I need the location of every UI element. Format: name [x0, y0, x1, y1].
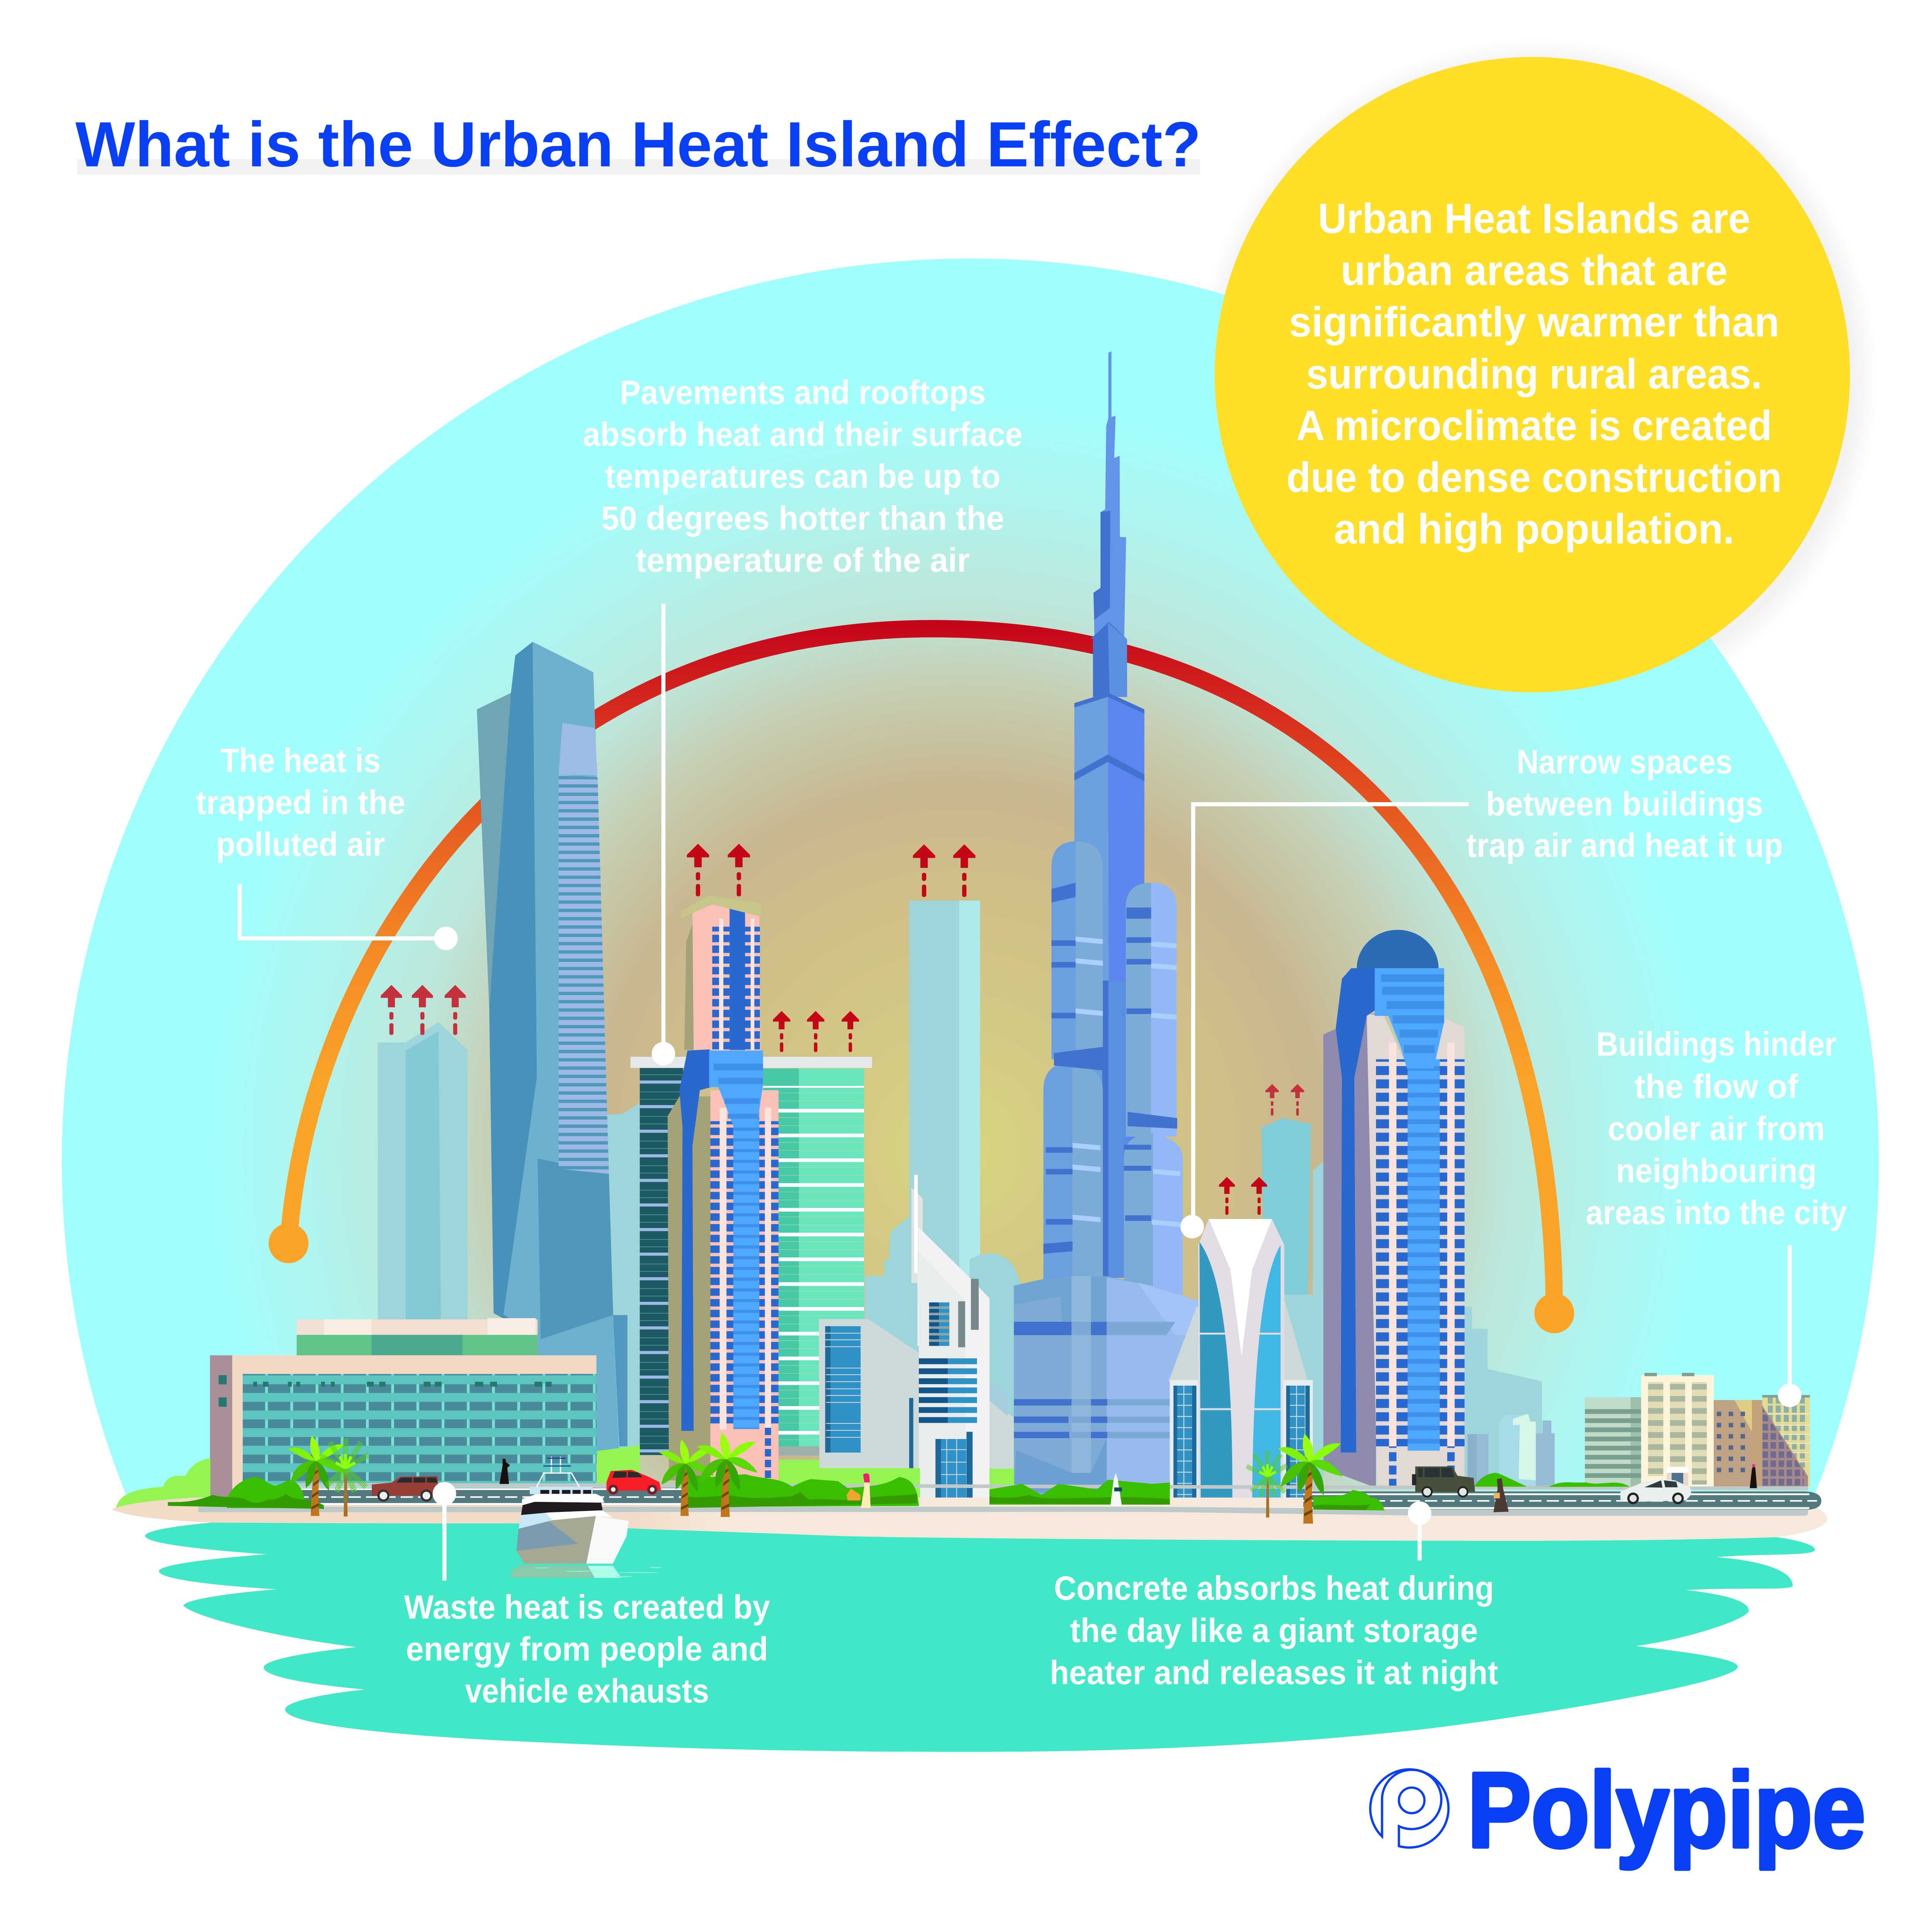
- red car: [607, 1470, 661, 1495]
- bushes right: [1313, 1473, 1630, 1510]
- rear pink tower: [681, 895, 762, 1051]
- text: buildings hinder: neighbouring: [1616, 1152, 1817, 1190]
- text: concrete: the day like a giant storage: [1070, 1611, 1478, 1649]
- callout lines and dots: [240, 604, 1801, 1581]
- Polypipe logo: Polypipe: [1468, 1750, 1866, 1870]
- Burj body and lobes: [1043, 622, 1183, 1294]
- shadow of yellow circle: [1194, 38, 1878, 723]
- text: narrow spaces: trap air and heat it up: [1466, 827, 1783, 864]
- yellow definition circle: due to dense construction: [1286, 454, 1782, 501]
- text: buildings hinder: cooler air from: [1608, 1109, 1825, 1147]
- text: heat trapped: [196, 742, 405, 863]
- text: waste heat: energy from people and: [406, 1630, 768, 1668]
- palm trees: [288, 1432, 1343, 1524]
- heat dome: [62, 259, 1879, 1508]
- text: buildings hinder: areas into the city: [1586, 1194, 1847, 1231]
- text: concrete: Concrete absorbs heat during: [1054, 1569, 1494, 1607]
- brown car: [372, 1476, 439, 1502]
- teal rear tower right: [1262, 1118, 1323, 1490]
- pedestrians: [500, 1459, 1757, 1512]
- text: narrow spaces: [1466, 743, 1783, 864]
- hotel: [210, 1318, 597, 1501]
- text: buildings hinder: [1586, 1025, 1847, 1231]
- teal tower with roof: [631, 1057, 872, 1455]
- text: pavements: absorb heat and their surface: [583, 415, 1022, 453]
- yellow definition circle: surrounding rural areas.: [1306, 350, 1762, 398]
- white car: [1620, 1479, 1692, 1504]
- text: narrow spaces: between buildings: [1486, 785, 1763, 823]
- text: heat trapped: polluted air: [216, 825, 385, 863]
- Burj podium: [1014, 1276, 1198, 1507]
- text: pavements: Pavements and rooftops: [620, 374, 986, 412]
- title: What is the Urban Heat Island Effect?: [75, 109, 1201, 180]
- pale centre tower and silhouettes: [865, 901, 1021, 1469]
- dark SUV: [1412, 1466, 1475, 1497]
- yellow definition circle: A microclimate is created: [1296, 402, 1772, 449]
- yellow definition circle: and high population.: [1334, 506, 1734, 553]
- heat arrows: [381, 844, 1304, 1215]
- bushes centre: [681, 1474, 1170, 1508]
- yellow definition circle: [1215, 57, 1850, 692]
- text: pavements: 50 degrees hotter than the: [601, 499, 1004, 537]
- far left pale tower: [378, 1022, 468, 1332]
- blue tower with dome: [1323, 930, 1464, 1488]
- text: waste heat: vehicle exhausts: [465, 1672, 709, 1710]
- road and pavements: [198, 1483, 1821, 1516]
- yellow definition circle: significantly warmer than: [1289, 299, 1779, 346]
- text: waste heat: Waste heat is created by: [404, 1588, 770, 1626]
- heat arc with end points: [269, 629, 1574, 1333]
- yellow definition circle: Urban Heat Islands are: [1318, 195, 1750, 242]
- yacht: [511, 1457, 662, 1578]
- text: concrete: heater and releases it at night: [1050, 1653, 1498, 1691]
- bushes left: [168, 1477, 324, 1509]
- far right skyline silhouettes: [1464, 1307, 1542, 1488]
- grey office building: [819, 1319, 919, 1469]
- text: buildings hinder: the flow of: [1634, 1067, 1799, 1105]
- text: narrow spaces: Narrow spaces: [1517, 743, 1732, 781]
- text: heat trapped: The heat is: [220, 742, 381, 779]
- Burj spire: [1090, 351, 1127, 639]
- twin curved tower: [1158, 1219, 1317, 1516]
- text: pavements: temperatures can be up to: [605, 457, 1000, 495]
- text: waste heat: [404, 1588, 770, 1710]
- white emirates tower: [909, 1175, 1014, 1506]
- beach: [112, 1498, 1827, 1541]
- text: heat trapped: trapped in the: [196, 783, 405, 821]
- right low buildings: [1468, 1373, 1810, 1487]
- front pink tower with blue crown: [668, 1049, 779, 1483]
- text: pavements: temperature of the air: [636, 541, 970, 579]
- grass behind road: [116, 1446, 1014, 1508]
- big glass tower: [477, 642, 640, 1480]
- yellow definition circle: urban areas that are: [1341, 247, 1728, 294]
- text: buildings hinder: Buildings hinder: [1596, 1025, 1837, 1063]
- text: pavements: [583, 374, 1022, 579]
- text: concrete: [1050, 1569, 1498, 1691]
- hotel facade: [243, 1374, 597, 1485]
- sea: [145, 1520, 1815, 1752]
- green tower: [763, 1068, 865, 1456]
